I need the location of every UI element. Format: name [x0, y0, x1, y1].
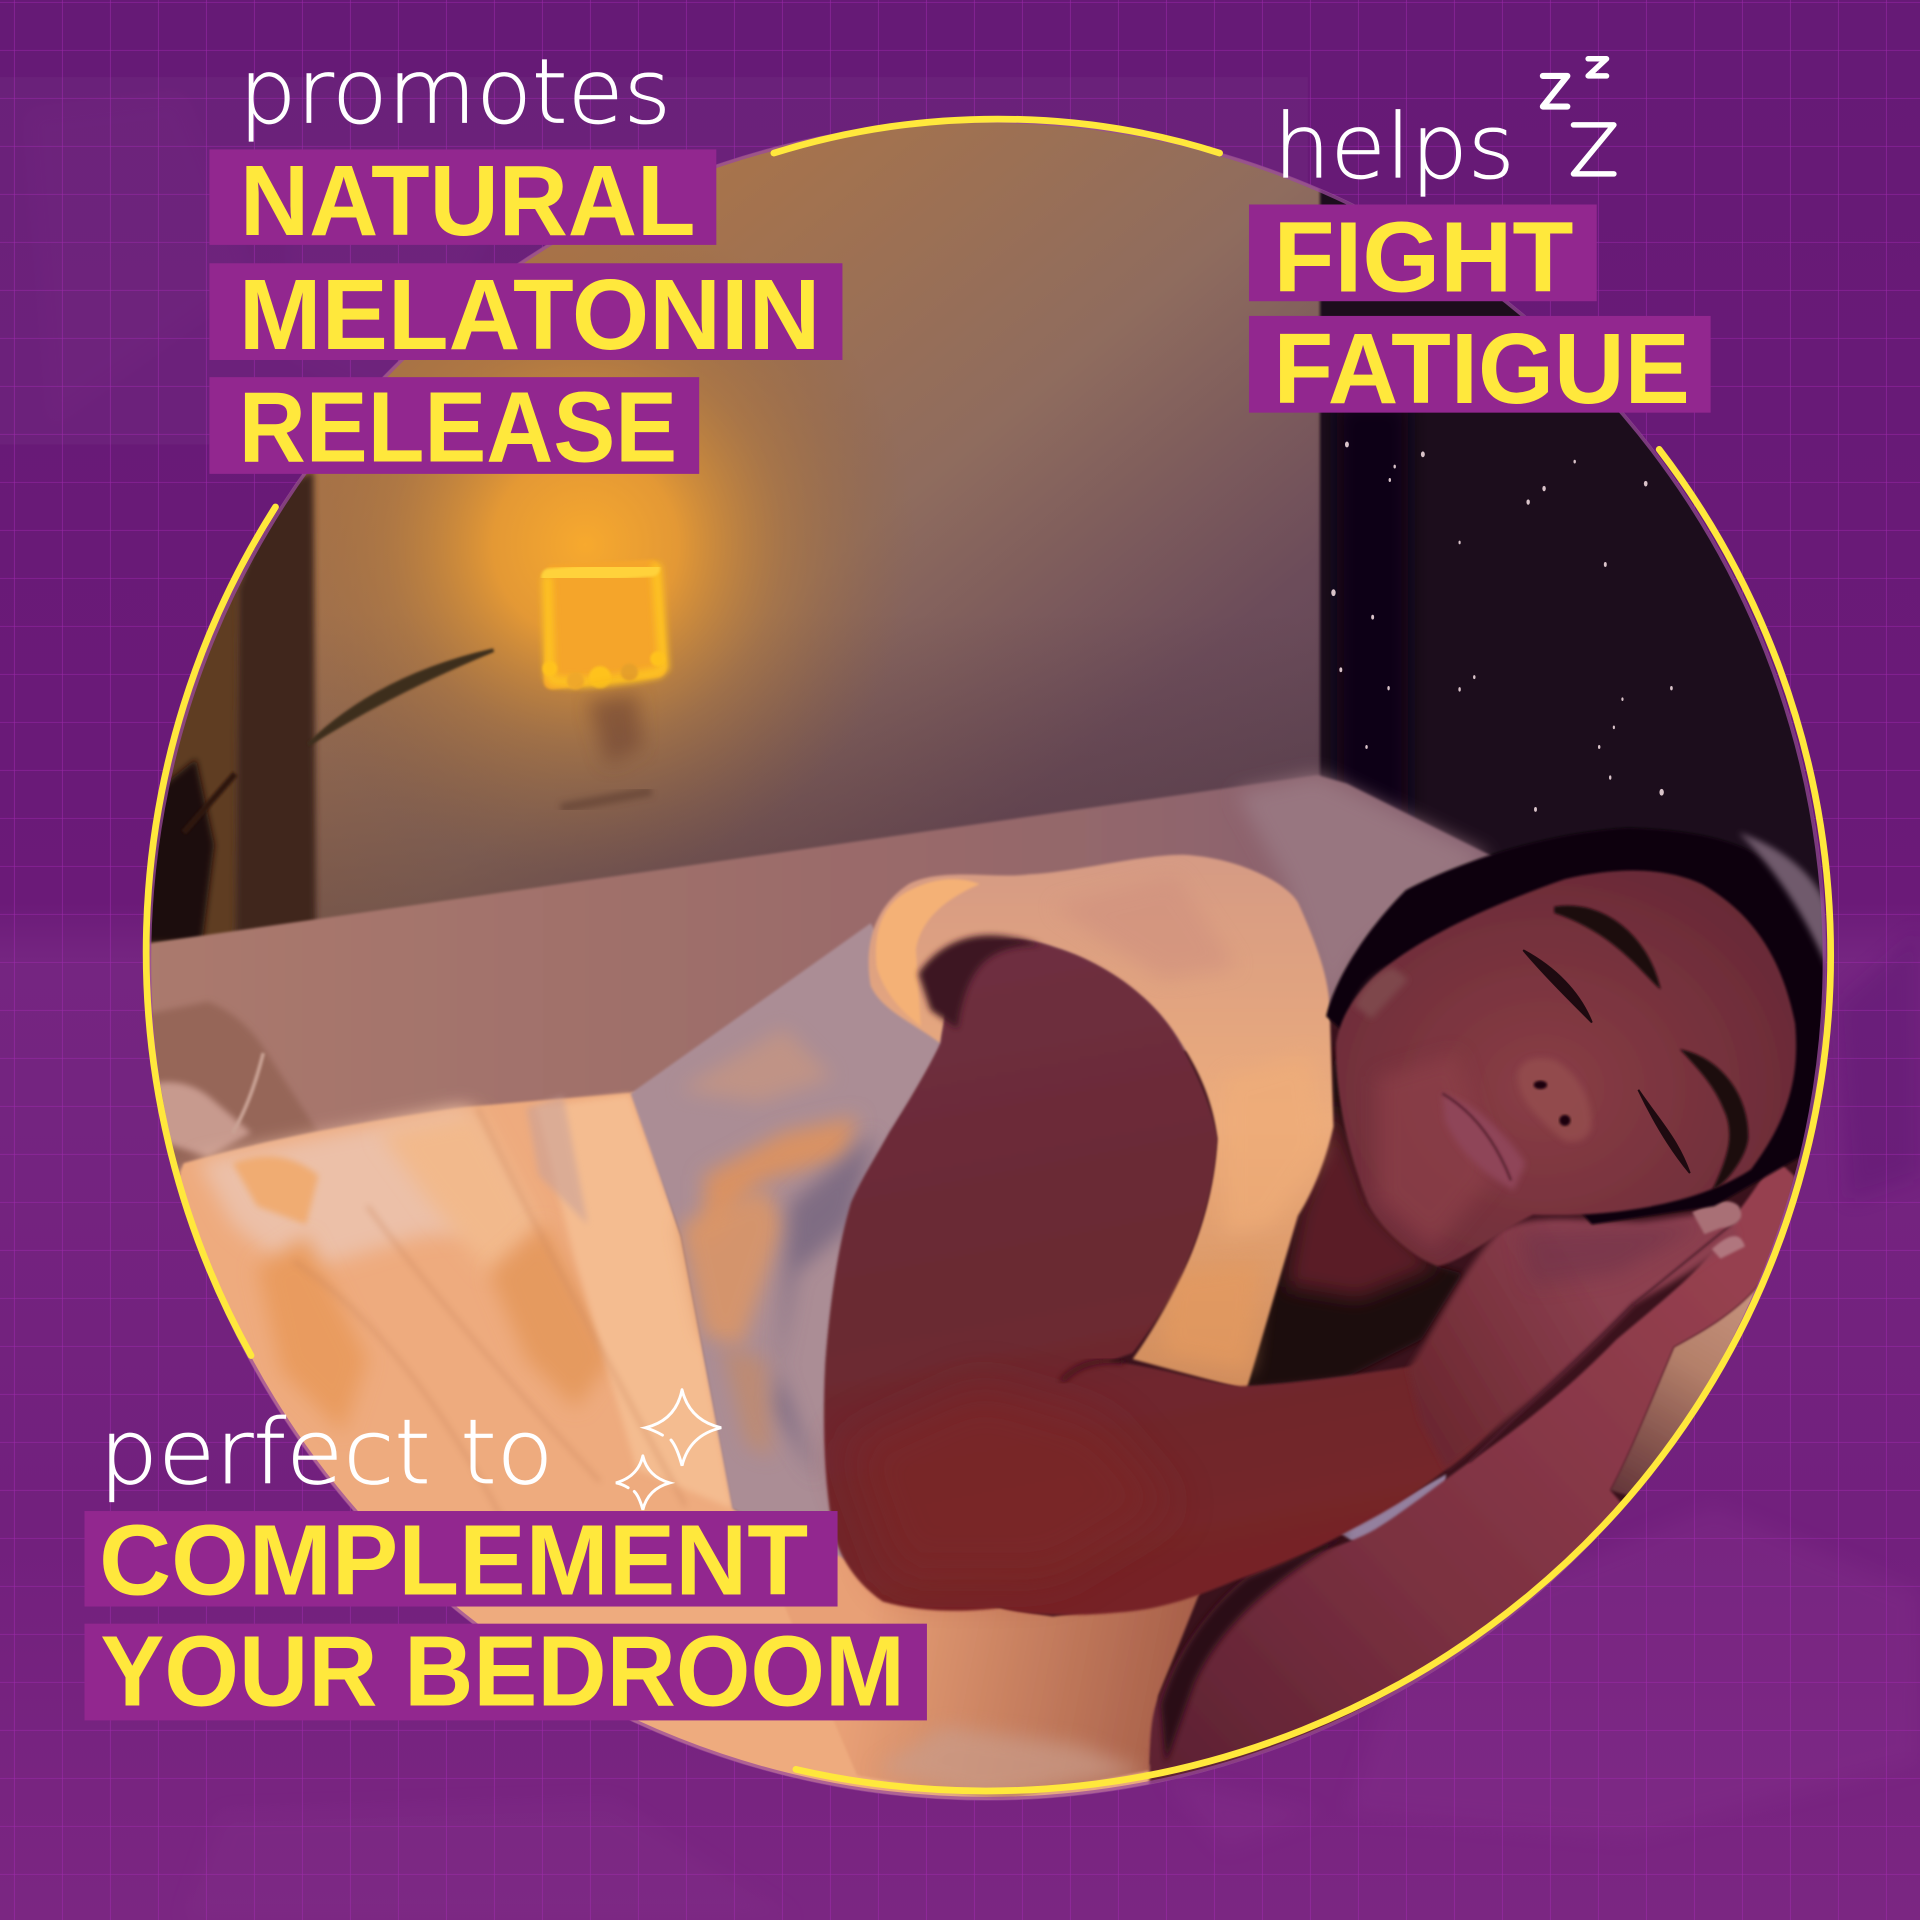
hair [1326, 828, 1832, 1224]
text block: promotes natural melatonin release: RELEASE [239, 372, 677, 484]
ring: yellow circle arcs [146, 119, 1831, 1791]
text block: promotes natural melatonin release: MELATONIN [239, 259, 820, 371]
text block: helps fight fatigue [1249, 96, 1711, 425]
lower arm [1149, 1158, 1795, 1812]
text block: perfect to complement your bedroom: perfect to [99, 1401, 553, 1505]
night light [542, 560, 666, 689]
icon: sparkles [616, 1390, 721, 1510]
text block: helps fight fatigue: helps [1273, 96, 1515, 200]
text block: perfect to complement your bedroom: COMPLEMENT [99, 1504, 808, 1616]
neck shadow [1240, 1041, 1463, 1389]
headboard with stars [1318, 189, 1821, 896]
face [1336, 871, 1796, 1266]
wall outlet [561, 693, 651, 808]
eyebrows and eyelashes [1523, 906, 1747, 1188]
upper arm and forearm [824, 935, 1531, 1615]
bed sheet and pillow [135, 775, 1494, 1176]
sleeve [869, 855, 1333, 1390]
text block: helps fight fatigue: FATIGUE [1273, 313, 1690, 425]
nose [1518, 1058, 1592, 1142]
text block: perfect to complement your bedroom [84, 1401, 927, 1728]
text block: promotes natural melatonin release: promotes [239, 40, 671, 144]
wall with night-light glow [235, 122, 1322, 924]
blanket under the arm [784, 1555, 1200, 1800]
text block: helps fight fatigue: FIGHT [1273, 201, 1573, 313]
plant trunk and leaves [135, 465, 493, 967]
text block: perfect to complement your bedroom: YOUR BEDROOM [100, 1616, 905, 1728]
lips [1442, 1093, 1526, 1190]
pillow near hands [1340, 1212, 1800, 1545]
hand [1408, 1201, 1745, 1469]
text block: promotes natural melatonin release [209, 40, 842, 484]
shirt lilac folds [631, 923, 943, 1580]
text block: promotes natural melatonin release: NATURAL [240, 145, 696, 257]
icon: sleeping zzz [1543, 59, 1614, 174]
blanket [180, 1091, 1164, 1800]
crumpled sheet left [153, 1002, 315, 1167]
